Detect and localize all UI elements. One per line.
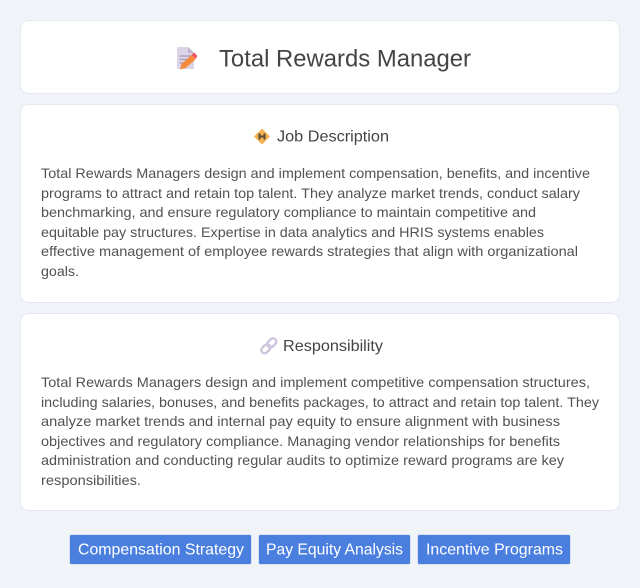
text block: job description: equitable pay structures. Expertise in data analytics and HRIS systems enables <box>41 224 544 240</box>
tag: incentive programs: Incentive Programs <box>426 542 563 558</box>
text block: responsibility: Total Rewards Managers design and implement competitive compensation structures, <box>41 374 590 390</box>
tag: compensation strategy: Compensation Strategy <box>78 542 244 558</box>
text block: job description: benchmarking, and ensure regulatory compliance to maintain competitive and <box>41 204 536 220</box>
tag: pay equity analysis: Pay Equity Analysis <box>266 542 403 558</box>
panel: job description <box>20 104 620 302</box>
text block: job description: goals. <box>41 263 79 279</box>
text block: responsibility: objectives and regulatory compliance. Managing vendor relationships for benefits <box>41 433 560 449</box>
heading: responsibility: Responsibility <box>283 338 383 355</box>
heading: job description: Job Description <box>277 128 389 146</box>
icon: memo and pencil <box>177 47 198 70</box>
panel: responsibility <box>20 314 620 510</box>
heading: job title: Total Rewards Manager <box>219 46 471 72</box>
text block: job description: effective management of employee rewards strategies that align with organizational <box>41 243 578 259</box>
text block: job description: programs to attract and retain top talent. They analyze market trends, conduct salary <box>41 185 580 201</box>
text block: responsibility <box>41 374 599 488</box>
tag: incentive programs <box>418 534 570 564</box>
tag: compensation strategy <box>70 534 252 564</box>
tag: pay equity analysis <box>258 534 410 564</box>
text block: responsibility: administration and conducting regular audits to optimize reward programs are key <box>41 452 564 468</box>
panel: title <box>20 20 620 94</box>
icon: orange diamond <box>254 128 270 144</box>
icon: chain link <box>260 337 278 355</box>
text block: responsibility: responsibilities. <box>41 472 141 488</box>
text block: job description <box>41 165 590 279</box>
text block: responsibility: analyze market trends and internal pay equity to ensure alignment with business <box>41 413 560 429</box>
text block: job description: Total Rewards Managers design and implement compensation, benefits, and incentive <box>41 165 590 181</box>
text block: responsibility: including salaries, bonuses, and benefits packages, to attract and retain top talent. They <box>41 394 599 410</box>
